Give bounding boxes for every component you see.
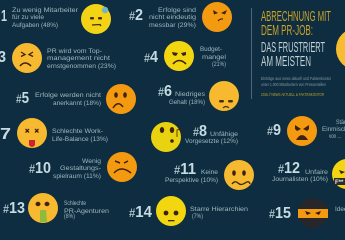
icon: vomiting face [28, 193, 58, 223]
item 1: Aufgaben (48%) [12, 22, 58, 29]
icon: angry face [202, 2, 232, 32]
item 15: #15 [269, 205, 291, 222]
item 11: Keine [201, 169, 218, 176]
item 6: #6 [158, 83, 172, 100]
item 8: Vorgesetzte (12%) [185, 138, 238, 145]
item 10: spielraum (11%) [53, 173, 101, 180]
item 3: PR wird vom Top- [47, 48, 102, 55]
item 4: mangel [202, 54, 227, 61]
icon: worried face [106, 84, 136, 114]
icon: displeased face [107, 152, 137, 182]
item 7: Schlechte Work- [52, 128, 103, 135]
item 10: #10 [29, 160, 51, 177]
item 14 [129, 196, 248, 226]
item 6: Gehalt (18%) [169, 99, 205, 106]
icon: wavy-mouth face [224, 160, 254, 190]
item 10: Wenig [82, 158, 101, 165]
item 8: Unfähige [210, 131, 238, 138]
item 2: messbar (29%) [149, 22, 196, 29]
item 4: #4 [144, 49, 158, 66]
item 7: Life-Balance (13%) [52, 136, 108, 143]
item 12: #12 [278, 160, 300, 177]
item 9 [267, 116, 345, 146]
item 12: Unfaire [305, 169, 328, 176]
item 11: Perspektive (10%) [165, 177, 218, 184]
icon: furious face [287, 116, 317, 146]
item 5 [16, 84, 136, 114]
item 3: ernstgenommen (23%) [47, 63, 116, 70]
icon: neutral face [156, 196, 186, 226]
item 14: (7%) [192, 213, 203, 220]
item 6 [158, 81, 239, 111]
icon: sad face [209, 81, 239, 111]
item 13: Schlechte [64, 200, 86, 207]
item 4: (21%) [212, 61, 226, 68]
icon: censored face: F** [335, 180, 344, 186]
item 14: Starre Hierarchien [190, 206, 248, 213]
item 11: #11 [174, 161, 196, 178]
item 2 [129, 2, 232, 32]
icon: dizzy face with tongue [17, 118, 47, 148]
item 12: Journalisten (10%) [272, 176, 328, 183]
item 1: Zu wenig Mitarbeiter [12, 7, 79, 14]
item 8 [151, 122, 238, 152]
item 13: PR-Agenturen [64, 208, 109, 215]
item 13 [3, 193, 109, 223]
item 15 [269, 198, 345, 228]
item 4: Budget- [200, 46, 222, 53]
item 14: #14 [129, 204, 152, 221]
item 13: (8%) [64, 213, 75, 220]
item 11 [165, 160, 254, 190]
title block [261, 9, 331, 97]
icon: sweating face [81, 4, 111, 34]
item 8: #8 [193, 123, 207, 140]
item 5: Erfolge werden nicht [35, 92, 101, 99]
item 10 [29, 152, 137, 182]
icon: squinting frown face [12, 43, 42, 73]
item 3 [0, 43, 116, 73]
item 1: für zu viele [12, 14, 44, 21]
item 10: Gestaltungs- [60, 165, 101, 172]
decorative large emoji at right edge [336, 28, 345, 70]
item 13: #13 [3, 200, 25, 217]
item 7: 7 [0, 126, 11, 143]
icon: ninja face [298, 198, 328, 228]
item 1: 1 [1, 8, 7, 25]
item 3: management nicht [47, 55, 110, 62]
item 9: #9 [267, 122, 281, 139]
item 12 [272, 159, 345, 189]
icon: frowning face [164, 41, 194, 71]
item 6: Niedriges [175, 91, 206, 98]
item 7 [0, 118, 108, 148]
item 4 [144, 41, 227, 71]
item 2: #2 [129, 7, 143, 24]
item 1 [1, 4, 111, 34]
item 5: #5 [16, 90, 29, 107]
item 5: anerkannt (18%) [53, 100, 101, 107]
item 2: Erfolge sind [158, 7, 196, 14]
icon: whistling face [151, 122, 182, 152]
title block: unter 1.000 Mitarbeitern von Pressestellen [261, 82, 326, 87]
item 2: nicht eindeutig [149, 14, 196, 21]
